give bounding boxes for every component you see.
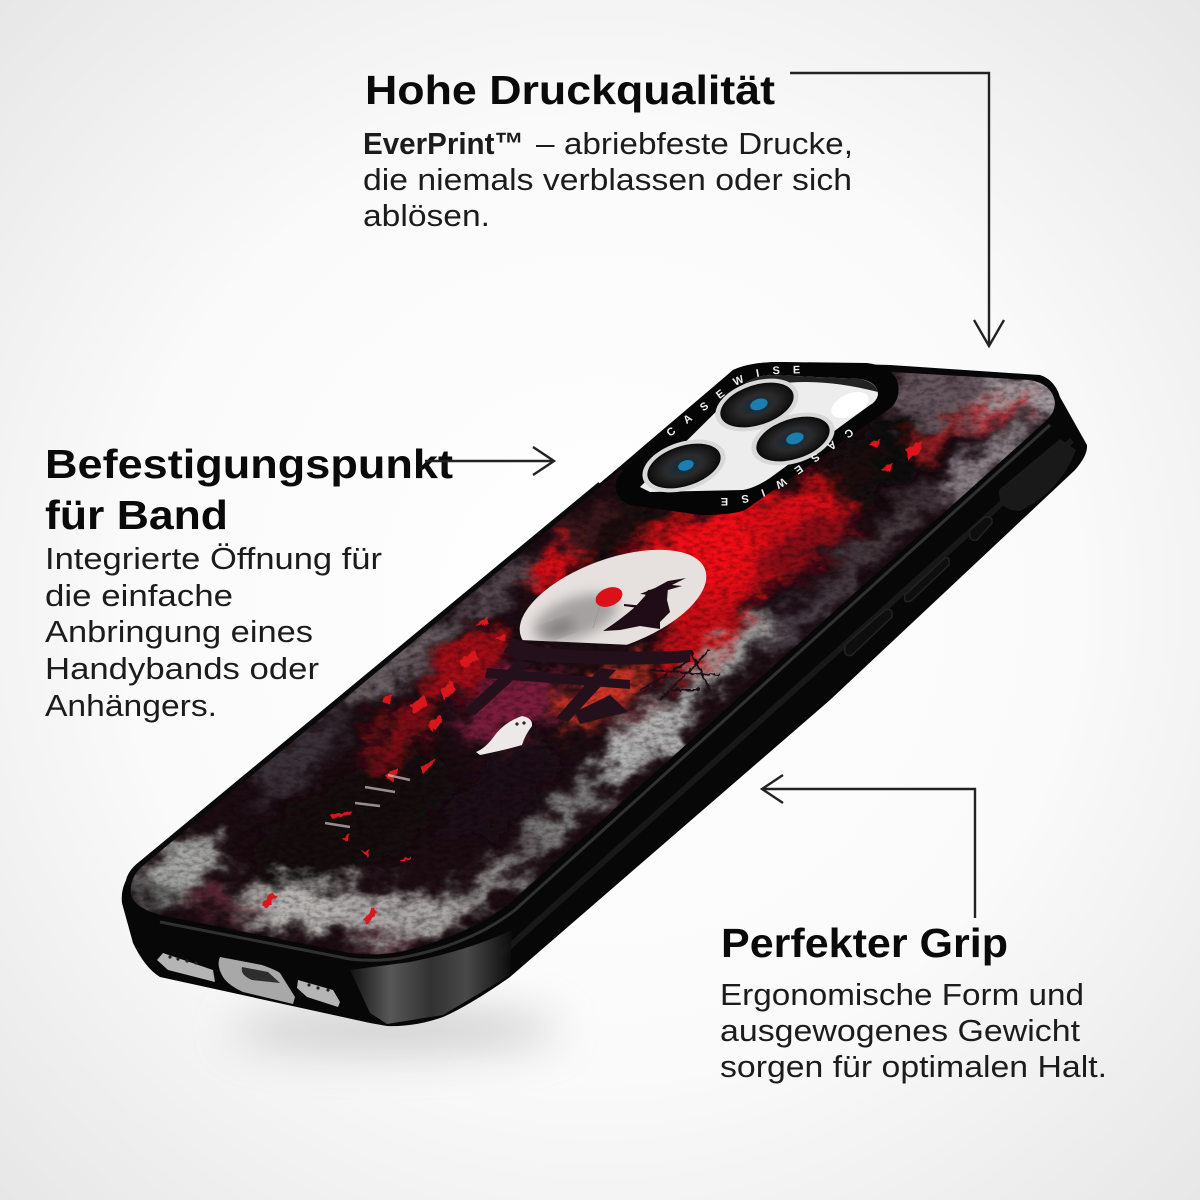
flash <box>827 387 873 423</box>
balloon <box>596 587 622 607</box>
heading: Hohe Druckqualität <box>365 67 775 113</box>
stairs <box>325 775 410 827</box>
paint grain <box>131 372 1055 954</box>
dark center <box>243 738 466 902</box>
body text: Anhängers. <box>45 688 217 723</box>
ghost <box>476 716 532 755</box>
witch <box>603 578 686 631</box>
left edge mist <box>449 549 541 631</box>
bottom clouds <box>230 884 370 932</box>
glossy corner <box>350 930 512 1024</box>
side buttons <box>845 440 1075 656</box>
lens right <box>745 403 841 475</box>
camera island <box>616 362 899 515</box>
phone case <box>122 362 1088 1026</box>
printed back artwork <box>130 372 1055 954</box>
bottom ports <box>157 953 340 1007</box>
arrow: print quality <box>790 73 1004 346</box>
camera island: CASEWISE <box>721 430 853 506</box>
torii gate <box>462 638 690 724</box>
arrow: grip <box>762 775 975 918</box>
body text: – abriebfeste Drucke, <box>536 126 853 161</box>
body text: Ergonomische Form und <box>720 977 1084 1012</box>
mid-left reds <box>412 618 518 712</box>
body text: EverPrint™ <box>363 126 524 161</box>
lower right mist <box>685 605 785 699</box>
body text: sorgen für optimalen Halt. <box>720 1049 1107 1084</box>
camera ring <box>616 362 899 515</box>
callout: Perfekter Grip <box>720 920 1107 1084</box>
branches <box>640 650 720 700</box>
callout: Befestigungspunkt für Band <box>45 441 453 723</box>
body text: Integrierte Öffnung für <box>45 541 382 576</box>
camera window <box>640 375 878 492</box>
face edge <box>128 484 600 885</box>
body text: Anbringung eines <box>45 614 313 649</box>
body text: ablösen. <box>363 198 490 233</box>
callout: Hohe Druckqualität <box>363 67 853 233</box>
lens top <box>709 369 805 441</box>
right rim mist <box>825 479 945 591</box>
moon <box>520 550 706 645</box>
top-right clouds <box>875 365 1045 425</box>
ring lettering: CASEWISE <box>667 366 800 436</box>
body text: die einfache <box>45 578 233 613</box>
body text: ausgewogenes Gewicht <box>720 1013 1080 1048</box>
red flecks <box>262 438 922 924</box>
red glow <box>652 463 871 644</box>
rim highlight <box>160 425 1050 960</box>
body text: Handybands oder <box>45 651 319 686</box>
heading: Perfekter Grip <box>721 920 1008 966</box>
arrow: strap attachment <box>425 447 554 475</box>
lens left <box>636 430 732 502</box>
heading: Befestigungspunkt <box>45 441 453 487</box>
body text: die niemals verblassen oder sich <box>363 162 852 197</box>
phone shadow <box>230 1008 560 1052</box>
heading: für Band <box>45 492 228 538</box>
case body <box>122 362 1087 1026</box>
